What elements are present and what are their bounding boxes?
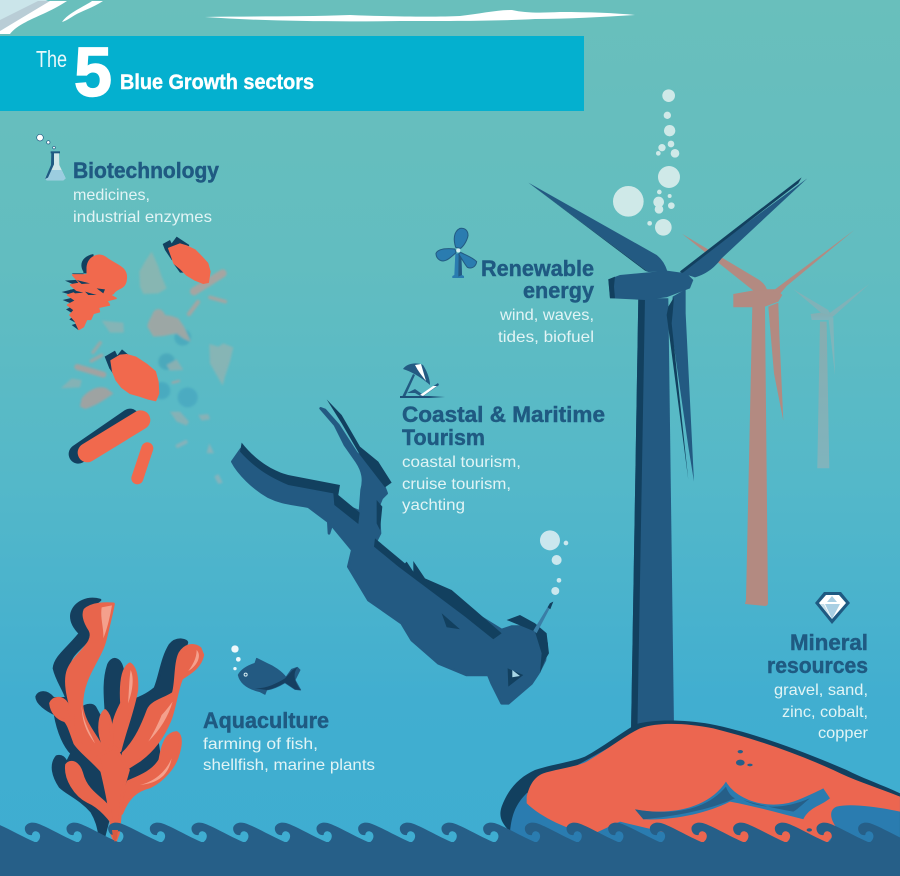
text: aquaculture: shellfish, marine plants <box>203 757 375 774</box>
text: mineral resources: Mineral <box>790 630 868 655</box>
icon: diamond <box>815 592 850 624</box>
coral: upper left <box>62 254 126 330</box>
nacelle <box>608 271 693 300</box>
seaweed highlights <box>82 605 199 785</box>
rock pebbles <box>738 750 743 753</box>
diver bubbles <box>540 530 568 595</box>
icon: bubbles above turbine <box>613 89 680 236</box>
crack in rock <box>635 782 830 819</box>
text: biotechnology: medicines, <box>73 187 150 204</box>
snorkel <box>533 602 553 633</box>
seaweed fronds <box>51 604 203 842</box>
seaweed <box>37 599 203 842</box>
text: mineral resources: zinc, cobalt, <box>782 704 868 721</box>
biotechnology organisms illustration <box>61 237 233 484</box>
text: mineral resources <box>767 630 869 742</box>
text: renewable energy: Renewable <box>481 256 594 281</box>
fish <box>231 645 301 694</box>
tower <box>631 298 674 733</box>
title banner: 5 <box>74 33 112 111</box>
icon: flask <box>37 134 66 180</box>
diver shading <box>240 399 549 673</box>
text: coastal and maritime tourism <box>402 402 605 514</box>
text: coastal and maritime tourism: cruise tourism, <box>402 476 511 493</box>
text: renewable energy <box>481 256 595 346</box>
faint background organisms <box>61 252 233 484</box>
third wind turbine (far) <box>793 284 869 468</box>
main wind turbine <box>528 177 807 733</box>
text: renewable energy: energy <box>523 278 595 303</box>
text: aquaculture: Aquaculture <box>203 708 329 733</box>
diver body <box>232 408 547 703</box>
top brush strokes <box>0 0 635 34</box>
text: coastal and maritime tourism: Coastal & Maritime <box>402 402 605 427</box>
text: coastal and maritime tourism: coastal tourism, <box>402 454 521 471</box>
diver arm and detail <box>442 613 523 687</box>
text: biotechnology <box>73 158 220 226</box>
seabed rock <box>500 720 900 857</box>
upper right blade <box>680 178 807 277</box>
diver <box>232 399 568 703</box>
coral: upper right <box>163 237 210 283</box>
text: biotechnology: Biotechnology <box>73 158 220 183</box>
text: aquaculture <box>203 708 375 774</box>
icon: small wind turbine <box>436 228 477 278</box>
text: renewable energy: tides, biofuel <box>498 329 594 346</box>
coral: centre <box>105 349 159 401</box>
second wind turbine (pink) <box>682 230 854 606</box>
text: mineral resources: resources <box>767 653 868 678</box>
icon: beach umbrella and lounger <box>400 363 445 398</box>
text: renewable energy: wind, waves, <box>499 307 594 324</box>
text: mineral resources: copper <box>818 725 869 742</box>
title banner: The <box>36 46 67 72</box>
text: biotechnology: industrial enzymes <box>73 209 212 226</box>
upper left blade <box>528 183 667 272</box>
text: coastal and maritime tourism: Tourism <box>402 425 485 450</box>
text: aquaculture: farming of fish, <box>203 736 318 753</box>
text: mineral resources: gravel, sand, <box>774 682 868 699</box>
seaweed stem tip <box>112 830 118 842</box>
title banner: Blue Growth sectors <box>120 71 314 94</box>
text: coastal and maritime tourism: yachting <box>402 497 465 514</box>
seaweed shadow <box>37 599 187 839</box>
lower blade <box>671 289 694 482</box>
sea cucumbers <box>78 418 147 478</box>
sea waves <box>0 823 900 876</box>
title banner <box>0 33 584 111</box>
